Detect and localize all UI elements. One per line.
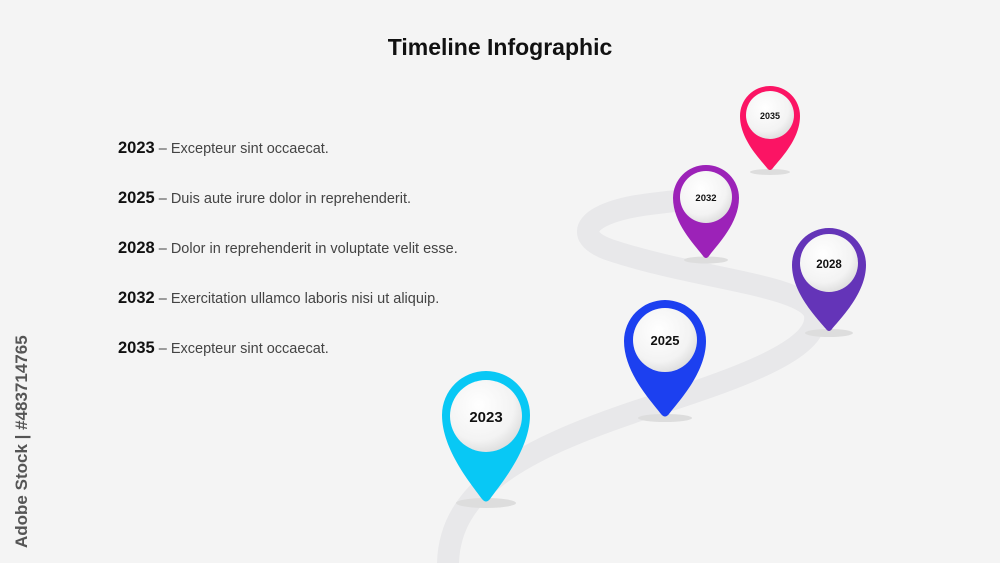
text list [118,139,458,357]
item 2032: 2032 – Exercitation ullamco laboris nisi ut aliquip. [118,289,439,307]
pin 2028: 2028 [816,259,842,271]
pin 2025 [624,300,706,422]
pin 2025: 2025 [651,333,679,348]
item 2025: 2025 – Duis aute irure dolor in reprehenderit. [118,189,411,207]
pin 2032 [673,165,739,264]
title: Timeline Infographic [388,34,612,60]
pin 2023 [442,371,530,508]
watermark vertical: Adobe Stock | #483714765 [12,335,31,548]
item 2023: 2023 – Excepteur sint occaecat. [118,139,329,157]
pin 2028 [792,228,866,337]
pin 2032: 2032 [695,193,717,204]
item 2028: 2028 – Dolor in reprehenderit in voluptate velit esse. [118,239,458,257]
pin 2035 [740,86,800,175]
pin 2035: 2035 [760,111,780,121]
pin 2023: 2023 [469,409,503,426]
item 2035: 2035 – Excepteur sint occaecat. [118,339,329,357]
